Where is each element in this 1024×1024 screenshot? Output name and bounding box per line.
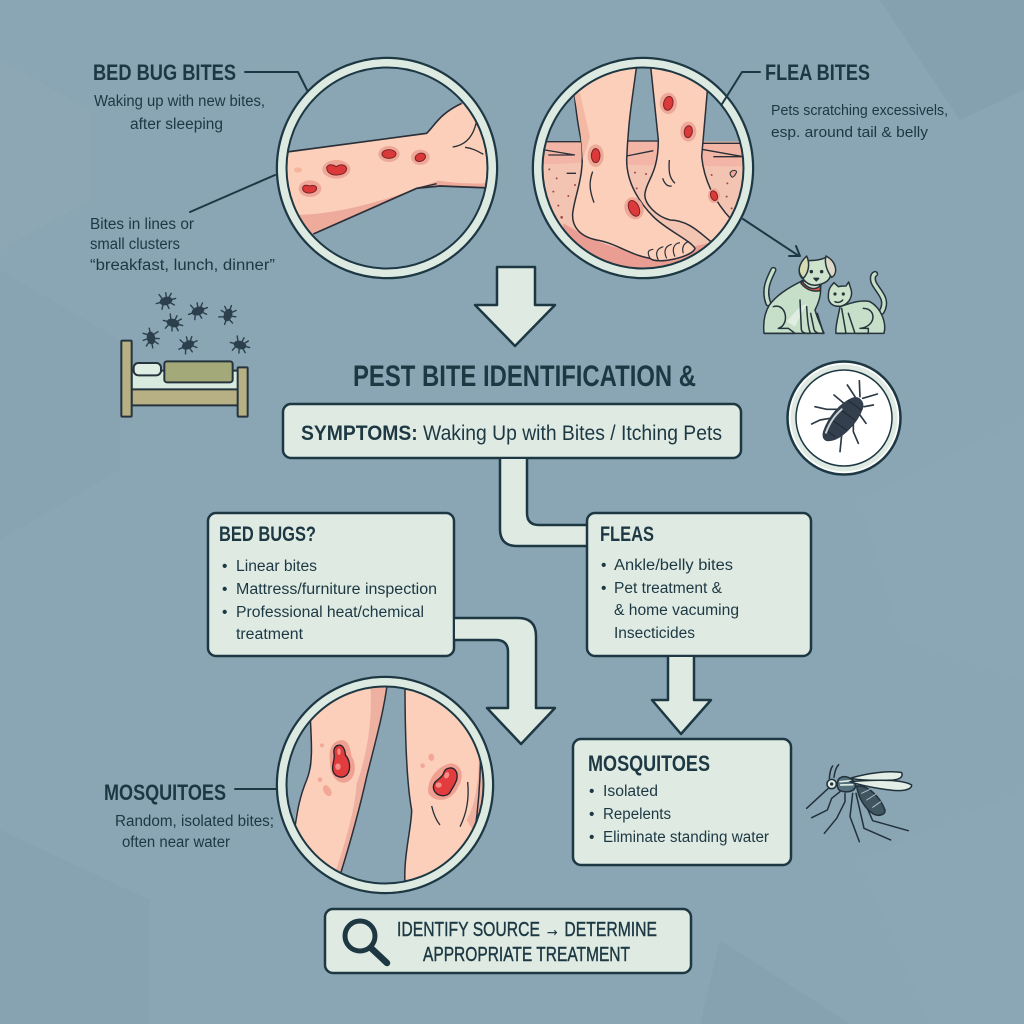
panel: bed bug bites callout [90,60,312,274]
bites [299,146,430,197]
list: fleas: • [601,580,606,597]
right foot [645,60,732,243]
panel: flea bites callout [722,60,948,256]
illustration: bed bug bites on arm [277,58,500,278]
text: bite pattern: small clusters [90,236,180,253]
left foot [572,60,695,261]
leader line: mosquitoes [235,788,276,790]
list: fleas: • [601,557,606,574]
list: fleas: Pet treatment & [614,580,723,597]
list: bed bugs: Linear bites [236,558,317,575]
ring [533,58,753,278]
text: waking up with bites: after sleeping [130,116,223,133]
text: pet scratching: esp. around tail & belly [771,124,929,141]
icon: bed bug in circle [788,362,900,474]
list: fleas: Ankle/belly bites [614,557,733,574]
leader line: bite pattern [190,175,275,212]
ground [544,142,742,167]
bite right [428,763,462,800]
arm [288,103,486,234]
text: identify source: APPROPRIATE TREATMENT [423,944,630,966]
text: identify source: IDENTIFY SOURCE → DETERMINE [397,919,657,941]
text: waking up with bites: Waking up with new bites, [94,93,265,110]
bites [588,93,720,223]
list: fleas: Insecticides [614,625,695,642]
list: bed bugs: Mattress/furniture inspection [236,581,437,598]
panel: symptoms box [283,404,741,458]
arrow: bed bugs to mosquito illustration [455,618,555,744]
ring [277,58,497,278]
text: mosquito bite pattern: often near water [122,834,230,851]
bed bugs [141,291,252,356]
arrow: to pets [743,219,800,256]
icon: bed with bed bugs [121,291,252,417]
list: bed bugs: Professional heat/chemical [236,604,424,621]
list: fleas: & home vacuming [614,602,739,619]
panel: identify source box [325,909,691,973]
legs [294,688,371,870]
heading: fleas: FLEAS [600,523,654,546]
ring [277,677,493,893]
list: mosquitoes: • [589,783,594,800]
bed [121,341,248,417]
leader line: flea heading [722,72,760,104]
list: mosquitoes: Repelents [603,806,671,823]
bite left [330,740,355,783]
icon: dog and cat [764,256,885,333]
list: bed bugs: treatment [236,626,304,643]
illustration: mosquito bites on legs [277,677,493,893]
text: pet scratching: Pets scratching excessivels, [771,102,948,119]
illustration: flea bites on feet [533,58,753,278]
arrow: main down arrow [475,267,555,346]
panel: fleas [587,513,811,656]
list: mosquitoes: • [589,806,594,823]
heading: flea bites: FLEA BITES [765,60,870,85]
heading: bed bug bites: BED BUG BITES [93,60,236,85]
panel: mosquitoes [573,739,791,865]
leader line: bed bug heading [245,72,312,100]
list: mosquitoes: Eliminate standing water [603,829,769,846]
panel: bed bugs [208,513,454,656]
text: symptoms: SYMPTOMS: Waking Up with Bites / Itching Pets [301,422,722,445]
text: mosquito bite pattern: Random, isolated bites; [115,813,274,830]
icon: mosquito [807,765,912,842]
list: mosquitoes: Isolated [603,783,658,800]
title: PEST BITE IDENTIFICATION & [353,360,696,393]
text: bite pattern: Bites in lines or [90,216,194,233]
list: bed bugs: • [222,581,227,598]
list: bed bugs: • [222,604,227,621]
list: mosquitoes: • [589,829,594,846]
heading: bed bugs: BED BUGS? [219,523,316,546]
arrow: fleas to mosquitoes [652,657,711,734]
connector: symptoms to fleas [500,459,588,546]
heading: mosquitoes left: MOSQUITOES [104,780,226,805]
heading: mosquitoes: MOSQUITOES [588,751,710,776]
list: bed bugs: • [222,558,227,575]
panel: mosquitoes callout [104,780,276,851]
icon: magnifying glass [345,921,387,963]
text: bite pattern: “breakfast, lunch, dinner” [90,257,275,274]
